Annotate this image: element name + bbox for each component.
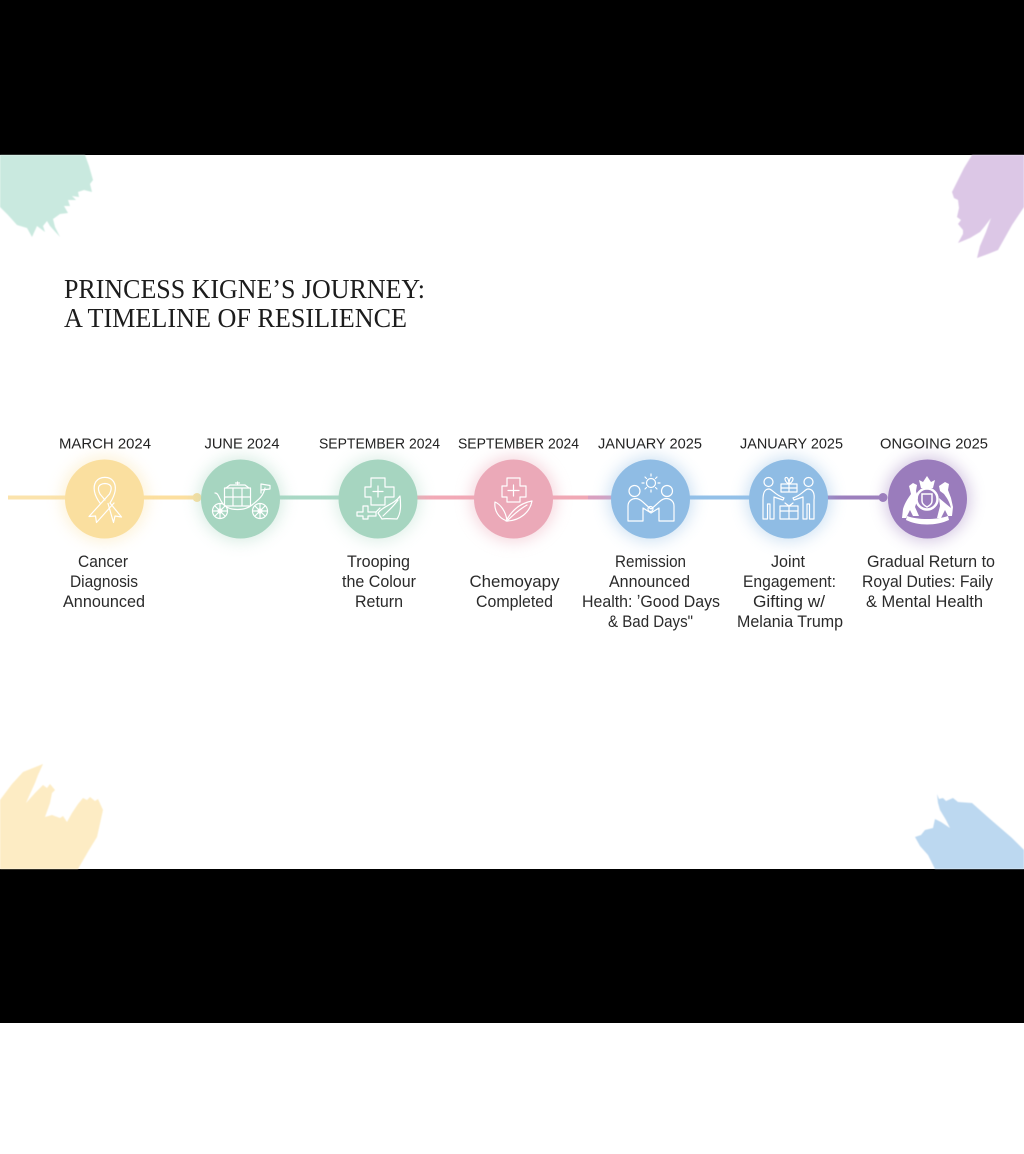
date: January 2025: JANUARY 2025 <box>740 436 843 452</box>
bottom black band <box>0 869 1024 1023</box>
milestone 7: Ongoing 2025 <box>862 436 995 611</box>
timeline connector line <box>8 493 888 502</box>
title <box>64 274 425 333</box>
date: September 2024: SEPTEMBER 2024 <box>319 436 440 452</box>
milestone 3: September 2024 <box>319 436 440 611</box>
milestone 5: January 2025 <box>582 436 720 631</box>
description: Royal Duties: Faily <box>862 573 994 591</box>
description: the Colour <box>342 573 416 591</box>
description <box>862 553 995 611</box>
date: March 2024: MARCH 2024 <box>59 436 151 452</box>
description: Announced <box>63 593 145 611</box>
node: carriage icon <box>201 460 280 538</box>
description: Engagement: <box>743 573 836 591</box>
title: PRINCESS KIGNE’S JOURNEY: <box>64 274 425 304</box>
description: Remission <box>615 553 686 571</box>
description <box>342 553 416 611</box>
brush stroke: bottom left yellow <box>0 764 103 869</box>
description: Diagnosis <box>70 573 138 591</box>
description <box>737 553 843 631</box>
description <box>63 553 145 611</box>
milestone 6: January 2025 <box>737 436 843 631</box>
description: Completed <box>476 593 553 611</box>
description: Gifting w/ <box>753 593 825 611</box>
milestone 1: March 2024 <box>59 436 151 611</box>
milestone 4: September 2024 <box>458 436 579 611</box>
description <box>470 573 560 611</box>
description: Trooping <box>347 553 410 571</box>
milestone 2: June 2024 <box>198 436 282 541</box>
top black band <box>0 0 1024 155</box>
description <box>582 553 720 631</box>
node: royal coat of arms icon <box>888 460 967 538</box>
description: Chemoyapy <box>470 573 560 591</box>
description: Announced <box>609 573 690 591</box>
node: medical cross and leaf icon <box>338 460 418 538</box>
brush stroke: bottom right blue <box>915 794 1024 869</box>
node: handshake and sun icon <box>611 460 690 538</box>
brush stroke: top right purple <box>952 155 1024 258</box>
date: January 2025: JANUARY 2025 <box>598 436 702 452</box>
title: A TIMELINE OF RESILIENCE <box>64 303 407 333</box>
description: Return <box>355 593 403 611</box>
node: cross and leaves icon <box>474 460 553 538</box>
description: Health: ʼGood Days <box>582 593 720 611</box>
date: June 2024: JUNE 2024 <box>204 436 280 452</box>
description: Gradual Return to <box>867 553 995 571</box>
node: ribbon icon <box>65 460 144 538</box>
description: Cancer <box>78 553 128 571</box>
date: September 2024: SEPTEMBER 2024 <box>458 436 579 452</box>
description: Melania Trump <box>737 613 843 631</box>
date: Ongoing 2025: ONGOING 2025 <box>880 436 988 452</box>
brush stroke: top left teal <box>0 155 93 237</box>
node: people exchanging gifts icon <box>749 460 828 538</box>
description: & Bad Days" <box>608 613 693 631</box>
description: & Mental Health <box>866 593 983 611</box>
description: Joint <box>771 553 805 571</box>
